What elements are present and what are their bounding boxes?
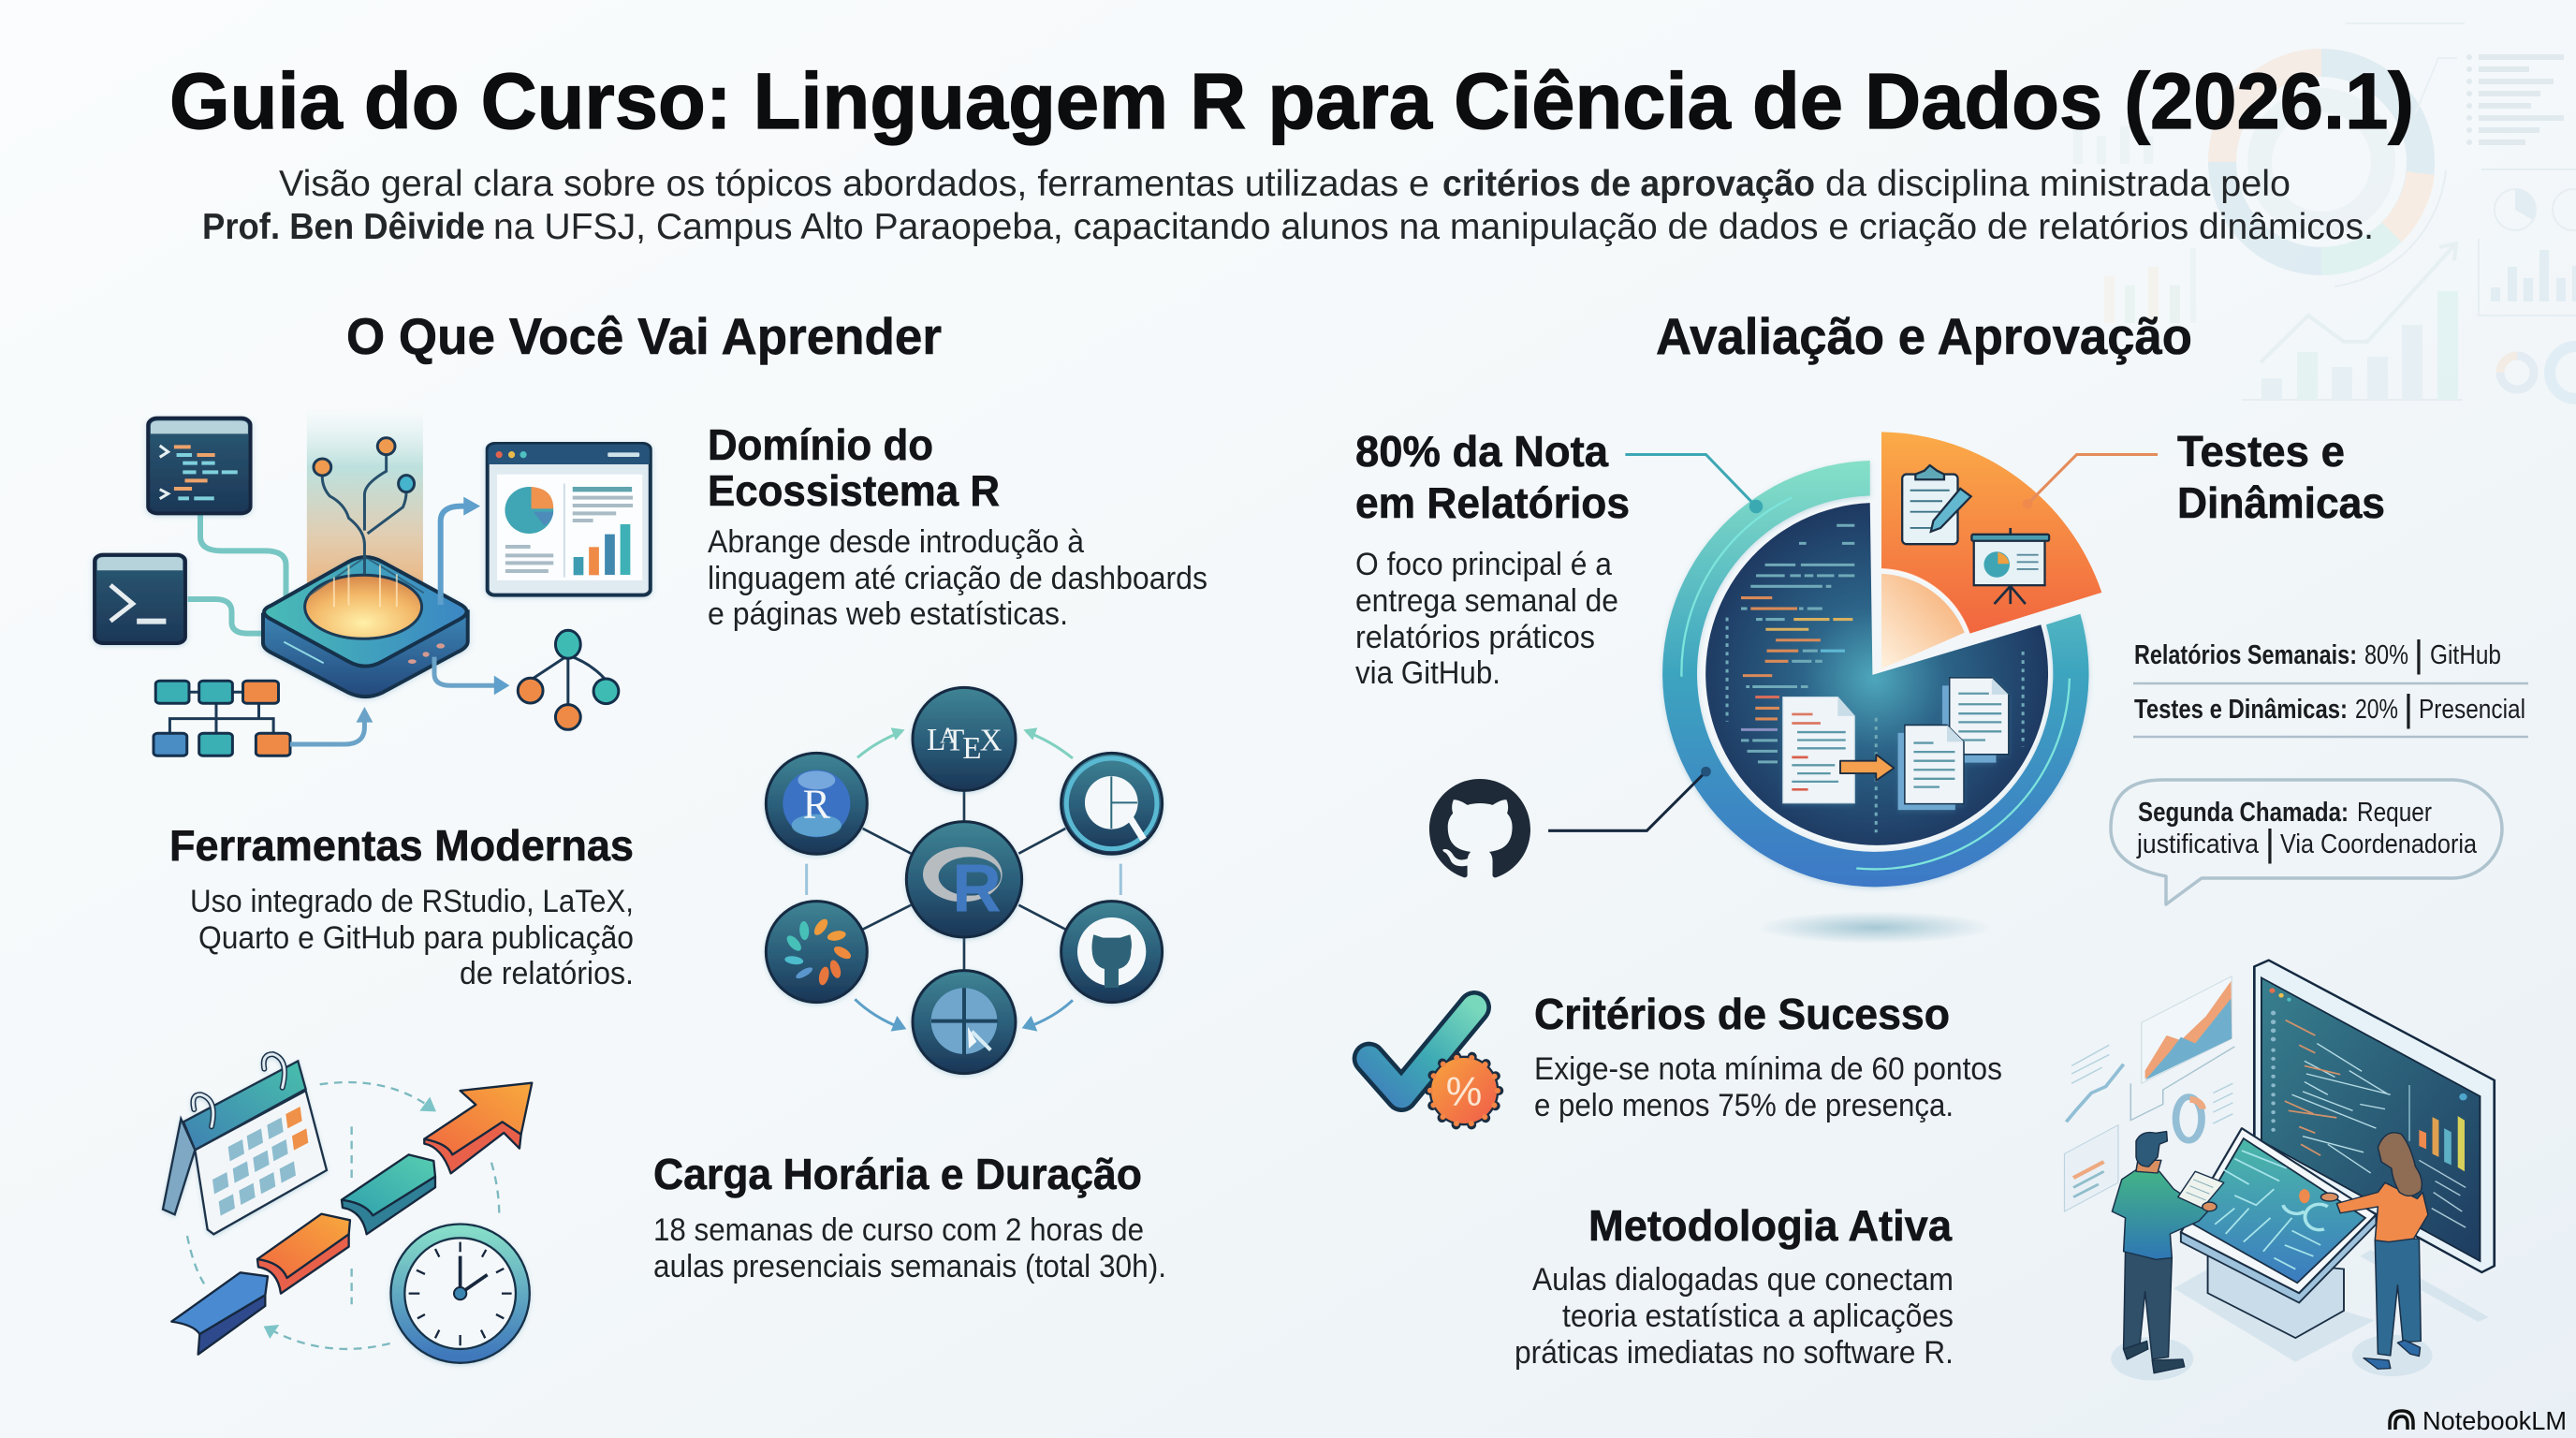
arrow: output to tree xyxy=(434,657,509,695)
illustration: R ecosystem hub xyxy=(95,409,651,756)
floating charts xyxy=(2064,976,2234,1211)
subtitle xyxy=(202,164,2374,247)
callout: segunda chamada: | xyxy=(2265,823,2275,864)
icon: progress arrow segments xyxy=(171,1083,532,1355)
icon: LaTeX node: L xyxy=(927,723,945,757)
icon: dashboard node xyxy=(913,971,1016,1074)
subtitle: na UFSJ, Campus Alto Paraopeba, capacitando alunos na manipulação de dados e criação de relatórios dinâmicos. xyxy=(493,207,2374,247)
person: man with paper xyxy=(2112,1132,2224,1373)
icon: check mark with percent badge xyxy=(1369,1007,1499,1125)
text block: Ferramentas Modernas xyxy=(169,821,634,991)
title: Guia do Curso: Linguagem R para Ciência de Dados (2026.1) xyxy=(169,57,2414,145)
icon: R core node xyxy=(906,822,1022,937)
text block: Testes e Dinâmicas: Dinâmicas xyxy=(2177,478,2385,527)
callout: segunda chamada: justificativa xyxy=(2136,829,2260,859)
icon: Quarto magnifier node xyxy=(1061,753,1163,854)
text block: 80% da Nota em Relatórios: via GitHub. xyxy=(1355,655,1500,691)
text block: Metodologia Ativa xyxy=(1515,1201,1954,1371)
table: grade weights: Relatórios Semanais: xyxy=(2134,640,2357,670)
table: grade weights: 20% xyxy=(2355,695,2398,725)
icon: presentation board xyxy=(1971,528,2049,604)
text block: Testes e Dinâmicas: Testes e xyxy=(2177,427,2345,476)
table: grade weights: | xyxy=(2414,634,2423,675)
icon: R core node: R xyxy=(952,851,1002,926)
subtitle: Visão geral clara sobre os tópicos abordados, ferramentas utilizadas e xyxy=(279,164,1429,204)
callout: segunda chamada: Requer xyxy=(2357,798,2432,828)
brand: NotebookLM: NotebookLM xyxy=(2422,1406,2567,1435)
arrow: orange transfer xyxy=(1840,755,1894,781)
text block: Domínio do Ecossistema R xyxy=(708,420,1208,632)
table: grade weights: 80% xyxy=(2364,640,2408,670)
icon: R node: R xyxy=(803,781,831,827)
icon: spiral logo node xyxy=(766,902,867,1003)
floor shadows xyxy=(2111,1250,2489,1381)
text block: Metodologia Ativa: Aulas dialogadas que conectam xyxy=(1532,1262,1954,1298)
text block: Metodologia Ativa: Metodologia Ativa xyxy=(1588,1201,1952,1250)
icon: dashboard window xyxy=(488,444,651,595)
heading: Avaliação e Aprovação: Avaliação e Aprovação xyxy=(1656,307,2192,365)
text block: Domínio do Ecossistema R: linguagem até criação de dashboards xyxy=(708,561,1208,596)
icon: clock xyxy=(389,1223,531,1364)
text block: Critérios de Sucesso xyxy=(1534,990,2002,1123)
text block: 80% da Nota em Relatórios: entrega semanal de xyxy=(1355,583,1618,619)
icon: clipboard xyxy=(1902,465,1971,544)
interactive table xyxy=(2181,1128,2376,1338)
icon: GitHub node xyxy=(1061,902,1163,1003)
icon: LaTeX node: E xyxy=(962,731,982,766)
table: grade weights: | xyxy=(2404,688,2413,729)
text block: Domínio do Ecossistema R: Domínio do xyxy=(708,420,933,469)
arrow: flow to chip xyxy=(290,707,373,744)
text block: 80% da Nota em Relatórios: O foco principal é a xyxy=(1355,547,1612,582)
heading: O Que Você Vai Aprender: O Que Você Vai Aprender xyxy=(346,307,942,365)
subtitle: Prof. Ben Dêivide xyxy=(202,207,485,247)
icon: R node xyxy=(766,753,867,854)
text block: Domínio do Ecossistema R: Abrange desde introdução à xyxy=(708,524,1084,560)
text block: Ferramentas Modernas: Quarto e GitHub para publicação xyxy=(198,920,634,956)
text block: Metodologia Ativa: práticas imediatas no software R. xyxy=(1515,1335,1954,1371)
icon: code editor xyxy=(148,418,251,513)
table: grade weights: Presencial xyxy=(2419,695,2525,725)
icon: report documents xyxy=(1783,678,2009,810)
text block: 80% da Nota em Relatórios xyxy=(1355,427,1630,691)
monitor xyxy=(2254,961,2495,1272)
icon: calendar xyxy=(163,1054,327,1234)
icon: LaTeX node: T xyxy=(945,724,964,758)
text block: Carga Horária e Duração xyxy=(653,1150,1166,1284)
background decoration: faint charts xyxy=(2073,23,2576,400)
table: grade weights: GitHub xyxy=(2430,640,2501,670)
pie: outer ring 80% xyxy=(1662,461,2089,887)
text block: Ferramentas Modernas: Uso integrado de RStudio, LaTeX, xyxy=(190,884,634,919)
icon: hierarchy nodes xyxy=(518,630,619,729)
dashed cycle arrows xyxy=(187,1082,499,1349)
icon: central processing chip xyxy=(263,557,468,697)
pie: orange sector 20% xyxy=(1881,432,2101,634)
illustration: schedule and duration xyxy=(163,1054,532,1364)
text block: Carga Horária e Duração: 18 semanas de curso com 2 horas de xyxy=(653,1212,1144,1248)
icon: flow diagram xyxy=(154,681,290,756)
table: grade weights xyxy=(2133,634,2528,737)
text block: Critérios de Sucesso: e pelo menos 75% de presença. xyxy=(1534,1088,1954,1123)
text block: Critérios de Sucesso: Critérios de Sucesso xyxy=(1534,990,1950,1038)
icon: terminal xyxy=(95,555,185,643)
text block: 80% da Nota em Relatórios: em Relatórios xyxy=(1355,478,1630,527)
callout: segunda chamada xyxy=(2111,780,2502,904)
person: woman pointing xyxy=(2321,1133,2428,1369)
subtitle: da disciplina ministrada pelo xyxy=(1825,164,2291,204)
text block: Carga Horária e Duração: Carga Horária e Duração xyxy=(653,1150,1142,1198)
chart: grade distribution pie xyxy=(1548,432,2158,944)
text block: 80% da Nota em Relatórios: 80% da Nota xyxy=(1355,427,1608,476)
pie: dark code sector xyxy=(1705,503,2048,845)
text block: Ferramentas Modernas: de relatórios. xyxy=(460,956,634,991)
text block: Domínio do Ecossistema R: e páginas web estatísticas. xyxy=(708,596,1068,632)
text block: 80% da Nota em Relatórios: relatórios práticos xyxy=(1355,620,1595,655)
callout line: 80 percent xyxy=(1625,454,1763,513)
table: grade weights: Testes e Dinâmicas: xyxy=(2134,695,2348,725)
callout: segunda chamada: Via Coordenadoria xyxy=(2280,829,2478,859)
icon: check mark with percent badge: % xyxy=(1446,1070,1482,1115)
callout line: GitHub xyxy=(1548,767,1711,830)
icon: LaTeX node: X xyxy=(980,724,1003,758)
callout line: 20 percent xyxy=(2023,454,2158,509)
callout: segunda chamada: Segunda Chamada: xyxy=(2138,798,2349,828)
text block: Ferramentas Modernas: Ferramentas Modernas xyxy=(169,821,634,870)
icon: GitHub mark xyxy=(1429,779,1530,877)
icon: LaTeX node: A xyxy=(940,724,957,748)
illustration: students at interactive screens xyxy=(2064,961,2495,1381)
code lines xyxy=(1727,525,2023,832)
icon: branching tree xyxy=(314,438,415,574)
text block: Carga Horária e Duração: aulas presenciais semanais (total 30h). xyxy=(653,1249,1166,1284)
text block: Critérios de Sucesso: Exige-se nota mínima de 60 pontos xyxy=(1534,1051,2002,1087)
text block: Testes e Dinâmicas xyxy=(2177,427,2385,527)
subtitle: critérios de aprovação xyxy=(1442,164,1815,204)
arrow: output to dashboard xyxy=(441,497,480,605)
icon: LaTeX node xyxy=(913,687,1016,790)
diagram: tools network xyxy=(766,687,1163,1074)
text block: Domínio do Ecossistema R: Ecossistema R xyxy=(708,466,1000,515)
text block: Metodologia Ativa: teoria estatística a aplicações xyxy=(1562,1299,1954,1334)
